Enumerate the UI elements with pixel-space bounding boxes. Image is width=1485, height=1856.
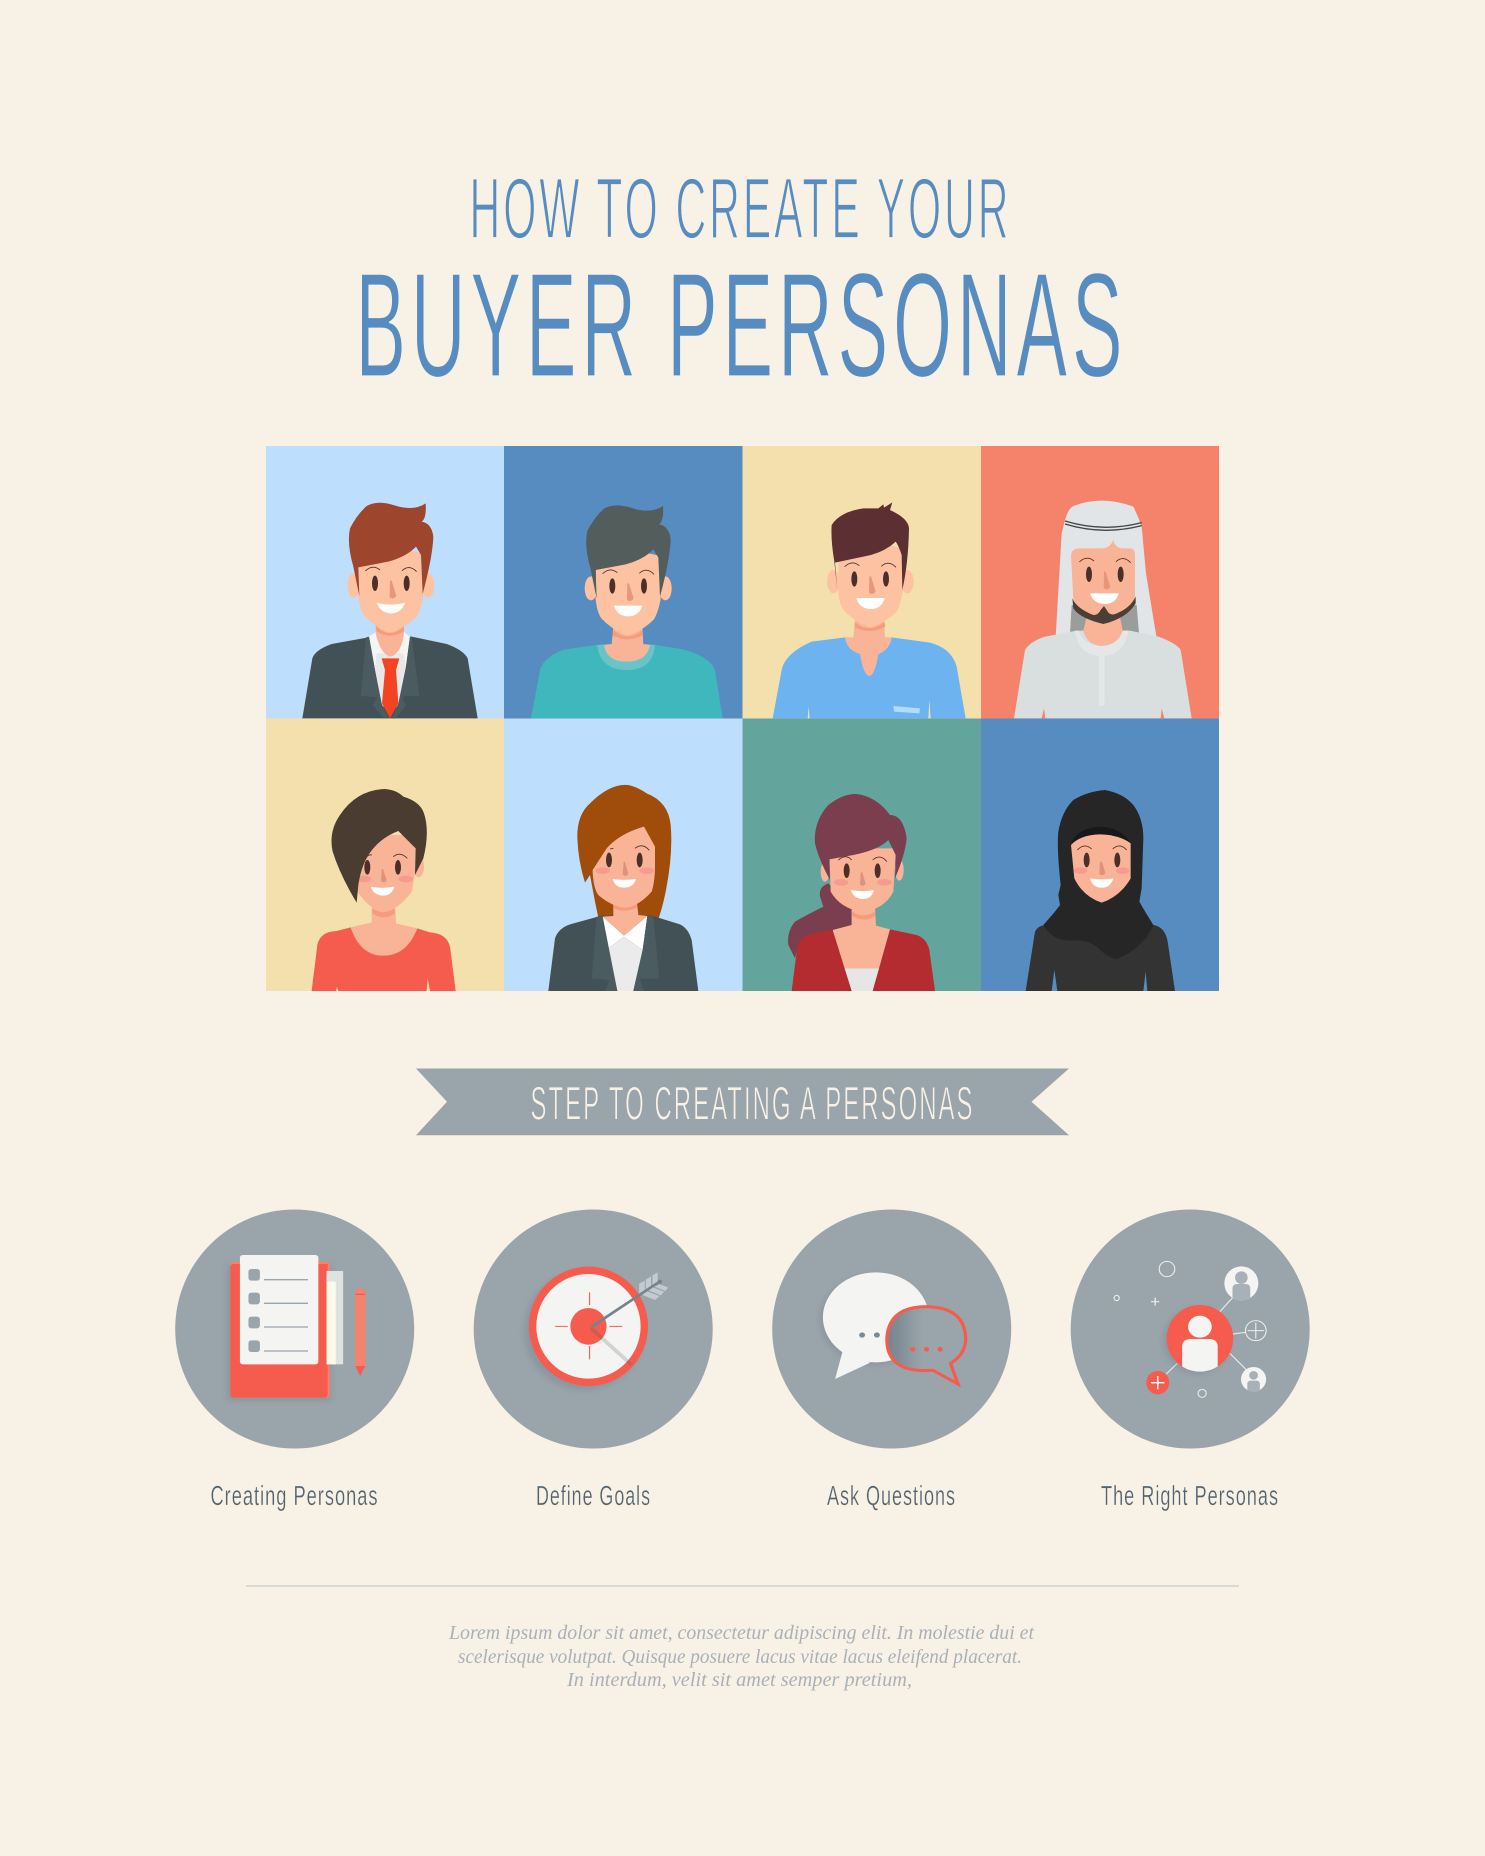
persona row 1, right half	[773, 501, 1192, 718]
footer text: Lorem ipsum dolor sit amet, consectetur adipiscing elit. In molestie dui et	[448, 1622, 1034, 1644]
icon: persona network	[1114, 1261, 1266, 1397]
step circle: define goals	[474, 1210, 713, 1448]
persona: woman with auburn hair and blazer	[548, 785, 698, 991]
footer text: scelerisque volutpat. Quisque posuere lacus vitae lacus eleifend placerat.	[458, 1646, 1022, 1668]
step circle: the right personas	[1071, 1210, 1310, 1448]
persona row 1, left half	[302, 503, 723, 718]
step label: ask questions: Ask Questions	[827, 1480, 956, 1511]
persona grid backgrounds	[266, 446, 1219, 991]
step label: the right personas: The Right Personas	[1101, 1480, 1279, 1511]
persona row 2, right half	[788, 790, 1175, 991]
footer text: In interdum, velit sit amet semper pretium,	[566, 1669, 912, 1691]
persona: woman in black hijab	[1026, 790, 1175, 991]
title	[356, 161, 1128, 408]
persona: man in blue shirt	[773, 502, 966, 718]
persona: woman with short dark hair	[312, 789, 456, 991]
icon: target with arrow	[524, 1267, 668, 1390]
footer text	[448, 1622, 1034, 1691]
persona row 2, left half	[312, 785, 698, 991]
step label: define goals: Define Goals	[536, 1480, 651, 1511]
persona: woman with ponytail and red cardigan	[788, 794, 935, 991]
step circle: ask questions	[772, 1210, 1011, 1448]
icon: speech bubbles	[820, 1272, 966, 1384]
banner text: STEP TO CREATING A PERSONAS	[530, 1076, 974, 1130]
persona: man in teal sweater	[531, 505, 723, 718]
persona: businessman with red tie	[302, 503, 478, 718]
persona: man in keffiyeh and thobe	[1014, 501, 1192, 718]
step circle: creating personas	[175, 1210, 414, 1448]
ribbon banner	[416, 1068, 1069, 1135]
step label: creating personas: Creating Personas	[210, 1480, 378, 1511]
icon: clipboard and pencil	[227, 1255, 365, 1401]
